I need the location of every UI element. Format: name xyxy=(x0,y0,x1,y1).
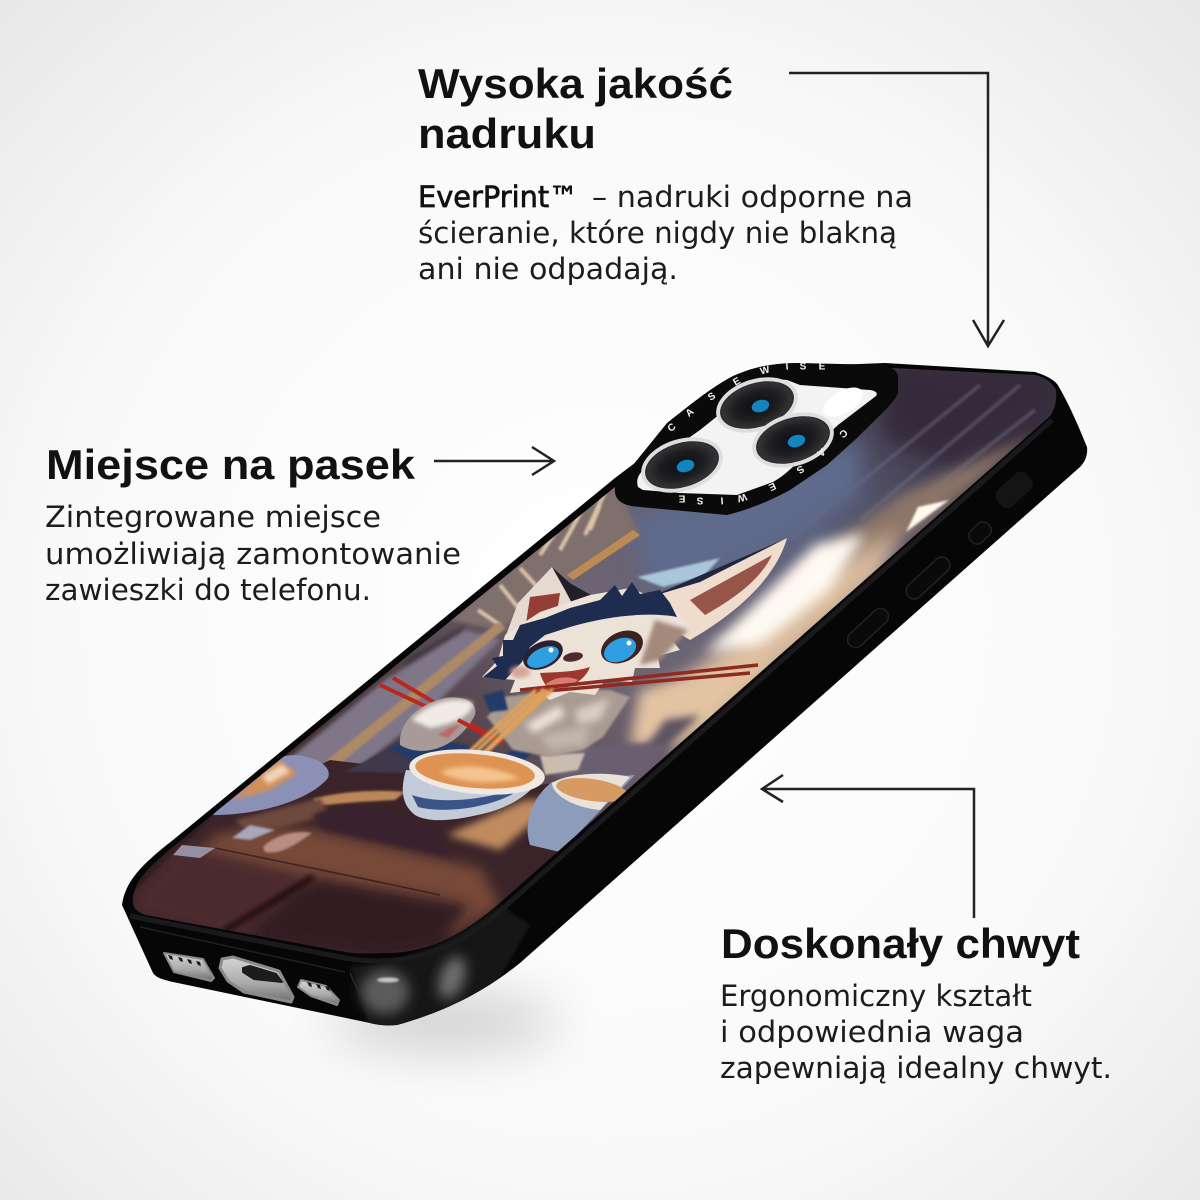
table base xyxy=(132,760,558,954)
camera glass xyxy=(637,380,877,495)
case body xyxy=(122,363,1087,1025)
top highlight xyxy=(906,500,949,532)
heading: nadruku xyxy=(418,110,596,157)
nose xyxy=(562,651,584,663)
arrow: to case back xyxy=(789,73,1004,346)
wall streaks xyxy=(861,384,1036,517)
body text: umożliwiają zamontowanie xyxy=(45,537,461,571)
tongue xyxy=(546,677,578,690)
callout: print quality xyxy=(418,60,1004,346)
lower dark wood xyxy=(250,878,470,955)
cat face fur xyxy=(482,588,690,700)
small foot xyxy=(263,832,312,853)
upper left plum xyxy=(136,844,313,934)
cat shaded cheek xyxy=(640,620,688,665)
ring lettering top: A xyxy=(684,406,696,420)
ring lettering top: E xyxy=(819,362,826,372)
body text xyxy=(418,180,913,286)
left ear xyxy=(503,567,600,643)
left interior xyxy=(290,628,500,764)
body text xyxy=(720,979,1112,1085)
upper chopsticks xyxy=(520,665,758,692)
body text: zawieszki do telefonu. xyxy=(45,573,371,607)
arrow: to case side xyxy=(762,775,974,918)
phone case xyxy=(100,340,1100,1030)
body text: Ergonomiczny kształt xyxy=(720,979,1032,1013)
body text: Zintegrowane miejsce xyxy=(45,500,381,534)
sign strokes xyxy=(478,492,605,625)
left plate xyxy=(213,755,329,815)
ring lettering bottom: W xyxy=(735,490,748,504)
noodles xyxy=(456,689,553,766)
callout: grip xyxy=(720,775,1112,1085)
wooden post xyxy=(325,622,506,762)
glossy corner and rims xyxy=(130,420,1052,1030)
heading: Wysoka jakość xyxy=(418,60,733,107)
arrow: to camera ring xyxy=(434,447,554,475)
ring lettering bottom: E xyxy=(678,492,685,504)
ring lettering top: S xyxy=(800,362,807,372)
body text xyxy=(45,500,461,607)
heading: Doskonały chwyt xyxy=(721,920,1080,967)
chopstick behind paw xyxy=(380,678,503,743)
left paw xyxy=(400,697,475,751)
lens right xyxy=(745,403,841,477)
ring lettering bottom: E xyxy=(766,480,777,493)
ring lettering top: E xyxy=(731,375,743,388)
upper window block xyxy=(450,485,640,630)
cat hair xyxy=(483,582,677,680)
chest highlights xyxy=(525,705,565,733)
main bowl xyxy=(403,744,547,820)
plank line xyxy=(215,848,440,895)
lens left xyxy=(634,428,730,502)
right eye xyxy=(596,624,648,670)
camera bump xyxy=(615,361,898,515)
body text: ani nie odpadają. xyxy=(418,252,678,286)
phone shadow xyxy=(330,994,560,1050)
camera ring xyxy=(615,363,898,515)
speaker grille left xyxy=(164,953,214,981)
ring lettering top: C xyxy=(666,421,678,435)
mouth xyxy=(540,667,590,690)
blue mid wall xyxy=(630,440,860,590)
side buttons xyxy=(844,468,1036,651)
ring lettering bottom: A xyxy=(815,445,827,459)
warm wall xyxy=(660,530,900,745)
small item xyxy=(232,825,275,840)
bright highlight xyxy=(706,533,865,652)
heading xyxy=(418,60,733,157)
dark window band xyxy=(406,626,464,666)
speaker grille right xyxy=(298,980,339,1005)
table brown band xyxy=(190,827,500,935)
tan beam upper xyxy=(567,530,640,580)
ring lettering bottom: I xyxy=(720,494,724,506)
charging port xyxy=(220,957,293,1002)
chopstick front xyxy=(458,720,487,735)
table light band xyxy=(235,798,328,829)
table peach right xyxy=(447,800,560,850)
ring lettering bottom: S xyxy=(794,463,806,476)
dark upper corner xyxy=(878,368,1049,465)
side bowl xyxy=(528,774,635,852)
body text: – nadruki odporne na xyxy=(592,180,913,214)
ring lettering top: I xyxy=(785,361,789,373)
cat blush xyxy=(510,666,530,678)
plank crease xyxy=(223,877,313,932)
body text: i odpowiednia waga xyxy=(720,1015,1024,1049)
lower peach wall xyxy=(630,655,770,745)
paper on table xyxy=(173,845,215,858)
cat blue fur low xyxy=(388,741,534,761)
ring lettering bottom: C xyxy=(837,426,849,440)
cat lower fur xyxy=(345,745,470,775)
right ear xyxy=(650,538,787,640)
table upper peach band xyxy=(313,791,405,806)
cat chest xyxy=(487,690,630,757)
camera gloss xyxy=(818,381,868,423)
ring lettering top: W xyxy=(759,364,772,378)
ring lettering top xyxy=(666,361,826,435)
ring lettering bottom xyxy=(678,426,849,506)
left eye xyxy=(518,634,568,676)
callout: strap slot xyxy=(45,441,554,607)
body text: ścieranie, które nigdy nie blakną xyxy=(418,216,897,250)
dark interior near edge xyxy=(644,710,702,752)
cat right forearm xyxy=(555,741,664,789)
ring lettering top: S xyxy=(706,390,718,403)
chest blue edge xyxy=(483,690,508,712)
window glow xyxy=(637,558,720,587)
body text: zapewniają idealny chwyt. xyxy=(720,1051,1112,1085)
mauve band xyxy=(832,434,1028,566)
heading: Miejsce na pasek xyxy=(46,441,416,488)
table shadow xyxy=(312,807,453,858)
chest highlight right xyxy=(575,698,610,725)
ring lettering bottom: S xyxy=(696,494,703,506)
body text: EverPrint™ xyxy=(418,180,578,214)
printed artwork xyxy=(132,368,1056,954)
lens top xyxy=(709,368,805,442)
chest highlight lower xyxy=(540,725,590,750)
